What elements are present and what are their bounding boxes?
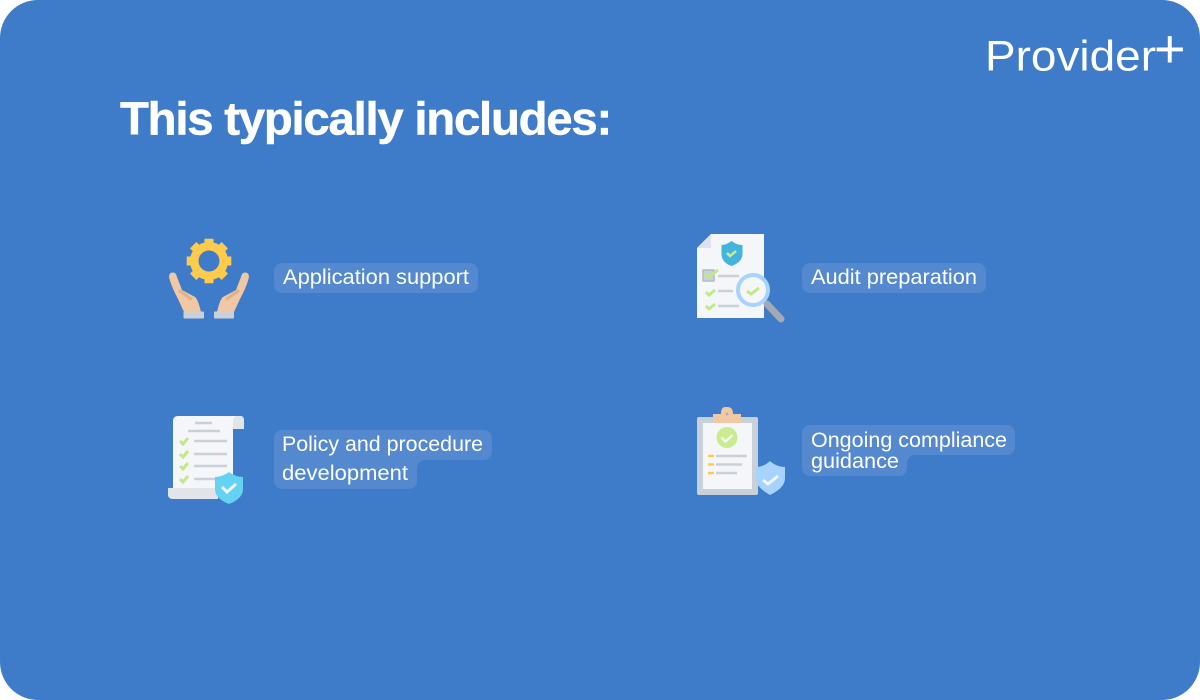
icon: gear in open hands [169,239,249,318]
icon: scroll with shield [168,416,244,504]
item: audit preparation [697,234,986,319]
label: audit preparation [802,263,986,293]
label: application support [274,263,478,293]
icon: checklist document with magnifier [697,234,781,319]
item: policy and procedure development [168,416,492,504]
label: ongoing compliance guidance: Ongoing compliance [811,429,1007,452]
label: audit preparation: Audit preparation [811,266,977,289]
label: ongoing compliance guidance: guidance [811,450,899,473]
logo: Provider+: + [1154,19,1186,79]
label: application support: Application support [283,266,469,289]
label: policy and procedure development: development [282,462,408,485]
label: ongoing compliance guidance [802,425,1015,476]
logo: Provider+ [985,19,1186,80]
label: policy and procedure development: Policy and procedure [282,433,483,456]
label: policy and procedure development [274,430,492,489]
icon: clipboard with shield [697,407,785,495]
item: application support [169,239,478,318]
logo: Provider+: Provider [985,32,1156,80]
title: This typically includes: [120,92,611,144]
item: ongoing compliance guidance [697,407,1015,495]
